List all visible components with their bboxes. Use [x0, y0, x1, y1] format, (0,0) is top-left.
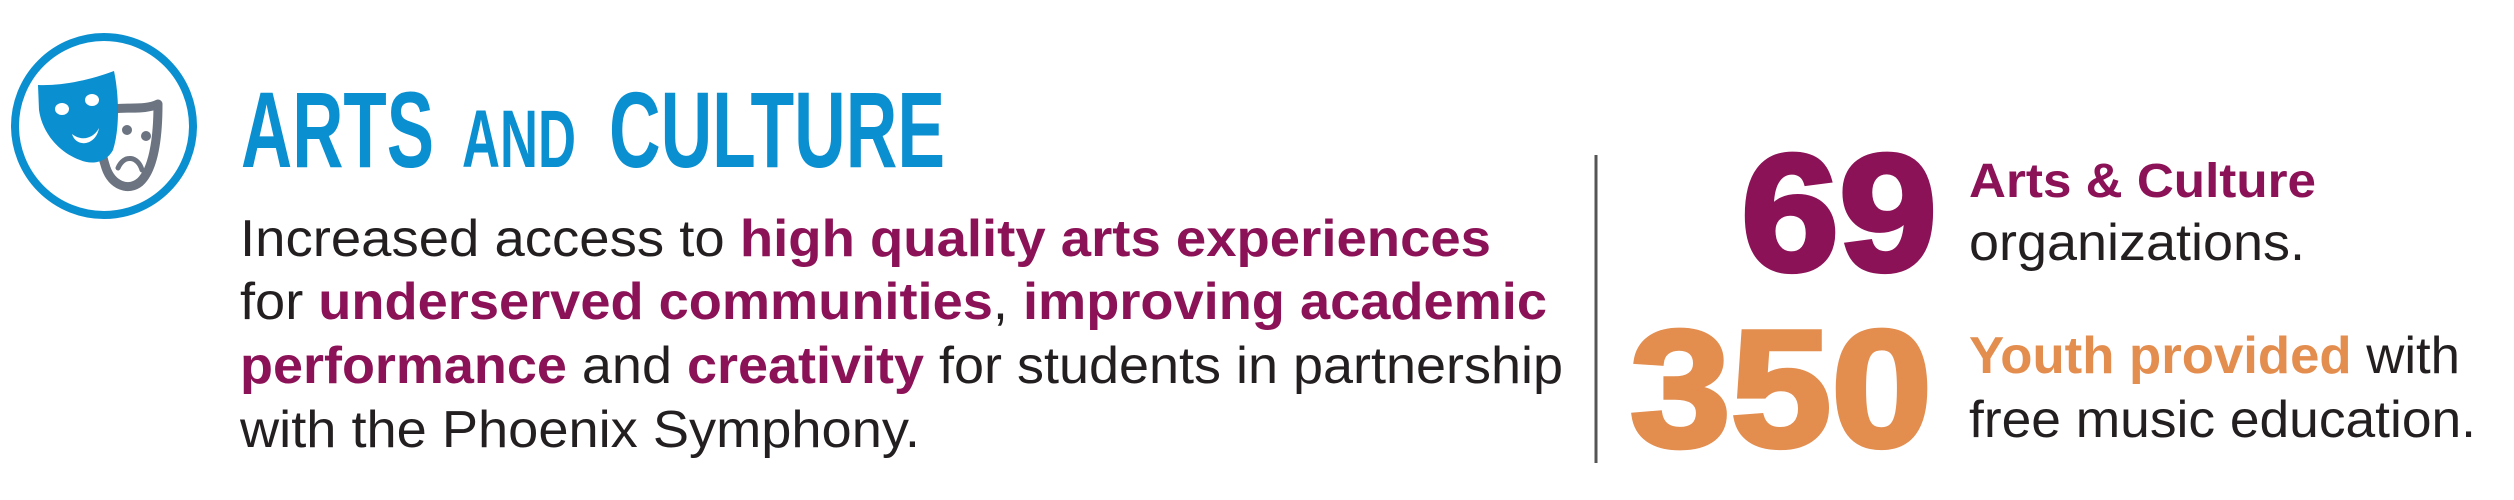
stat: 69 organizations: Arts & Culture: [1969, 155, 2316, 208]
stat: 350 youth: 350: [1630, 297, 1932, 482]
title: [241, 69, 945, 190]
description text: performance and creativity for students in partnership: [240, 337, 1563, 395]
title: AND: [462, 94, 576, 185]
description text: for underserved communities , improving academic: [240, 273, 1547, 331]
stat: 350 youth: [1630, 297, 2476, 482]
icon: theatre masks: [15, 37, 193, 215]
stat: 69 organizations: organizations.: [1969, 214, 2305, 272]
title: ARTS: [241, 69, 434, 190]
description text: with the Phoenix Symphony.: [239, 401, 920, 459]
stat: 350 youth: free music education.: [1969, 391, 2476, 449]
stat: 350 youth: Youth provided with: [1969, 327, 2460, 385]
stat: 69 organizations: [1741, 121, 2316, 306]
stat: 69 organizations: 69: [1741, 121, 1937, 306]
description text: Increased access to high quality arts experiences: [240, 210, 1491, 268]
title: CULTURE: [609, 69, 945, 190]
description text: [239, 210, 1563, 459]
